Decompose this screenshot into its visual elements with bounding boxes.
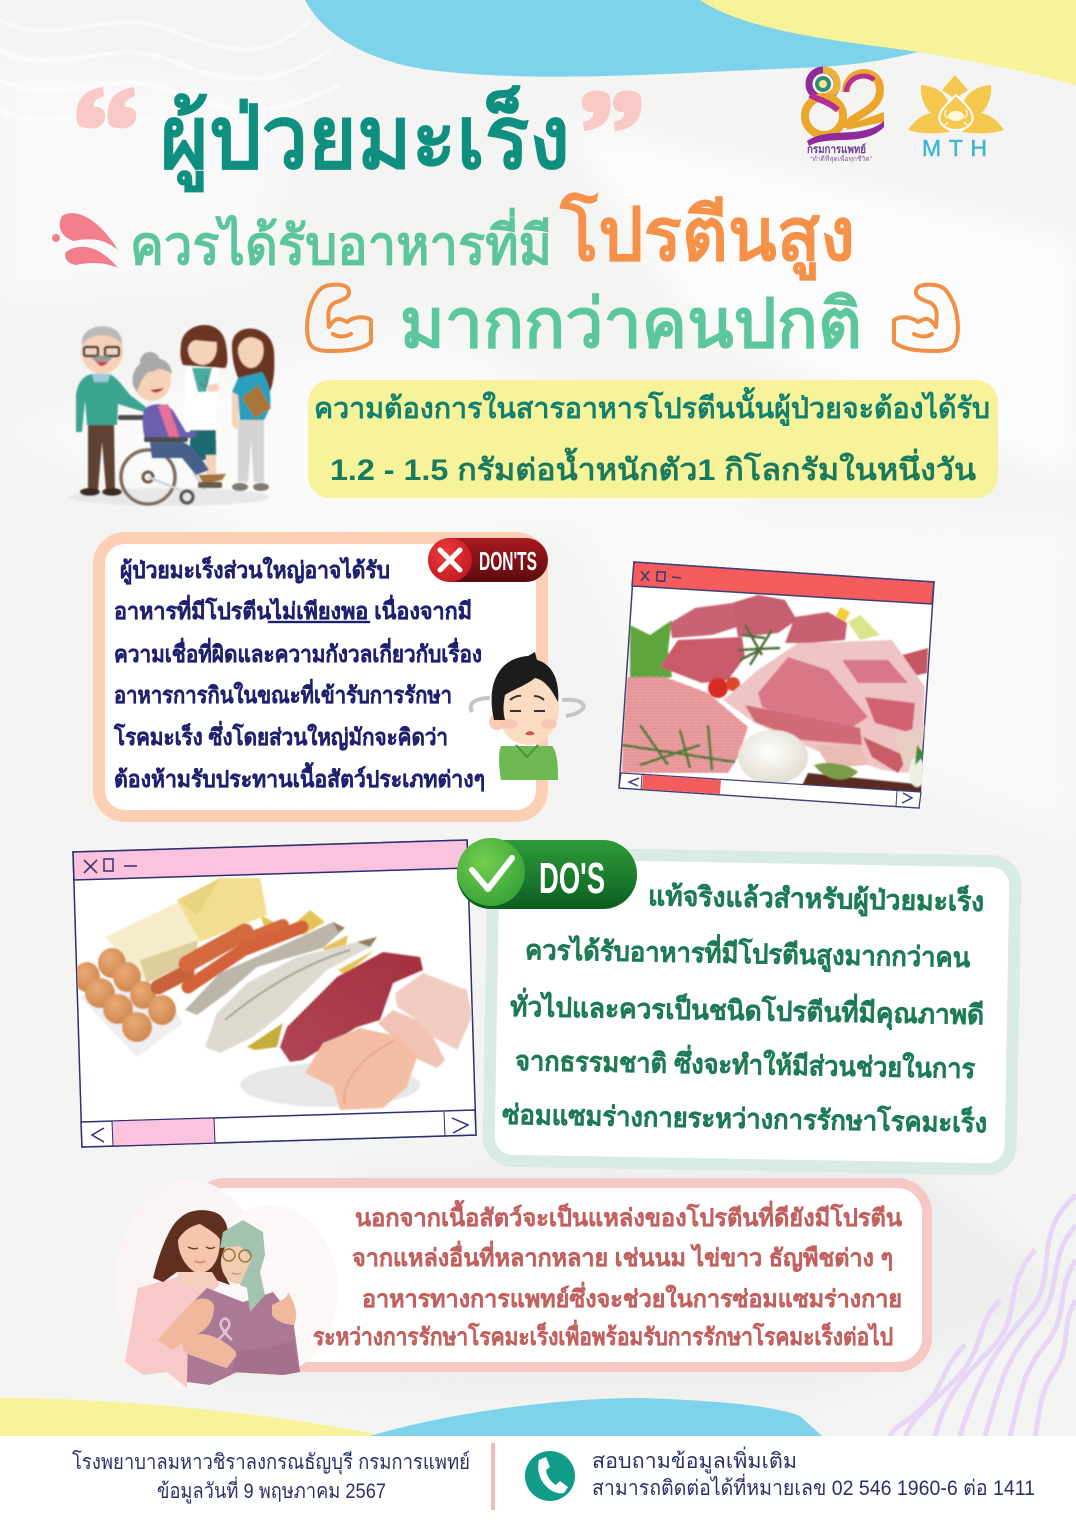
lavender wavy lines bbox=[890, 1195, 1076, 1436]
subheading text orange: high protein: โปรตีนสูง bbox=[559, 191, 855, 281]
text block: don'ts explanation: อาหารการกินในขณะที่เข้ารับการรักษา bbox=[114, 678, 452, 708]
text block: other sources: นอกจากเนื้อสัตว์จะเป็นแหล่งของโปรตีนที่ดียังมีโปรตีน bbox=[355, 1199, 903, 1232]
text block: do's explanation: แท้จริงแล้วสำหรับผู้ป่วยมะเร็ง bbox=[648, 878, 984, 919]
title: patients with cancer bbox=[76, 84, 642, 193]
bottom colour shapes bbox=[0, 1398, 822, 1436]
callout: daily protein requirement: 1.2 - 1.5 กรัมต่อน้ำหนักตัว1 กิโลกรัมในหนึ่งวัน bbox=[330, 447, 977, 487]
icon: left quote mark bbox=[76, 87, 136, 129]
logo: 82 years Department of Medical Services bbox=[805, 70, 884, 163]
footer: hospital and date bbox=[72, 1450, 470, 1504]
window controls bbox=[84, 859, 137, 873]
title bar bbox=[632, 562, 934, 604]
footer: hospital and date: โรงพยาบาลมหาวชิราลงกรณธัญบุรี กรมการแพทย์ bbox=[72, 1450, 470, 1475]
top colour shapes bbox=[305, 0, 1076, 85]
text block: other sources bbox=[313, 1199, 903, 1351]
footer bbox=[0, 1436, 1076, 1521]
text block: other sources: ระหว่างการรักษาโรคมะเร็งเพื่อพร้อมรับการรักษาโรคมะเร็งต่อไป bbox=[313, 1319, 893, 1351]
panel: don'ts bbox=[99, 538, 548, 816]
footer: contact: สอบถามข้อมูลเพิ่มเติม bbox=[592, 1446, 797, 1474]
callout: daily protein requirement: ความต้องการในสารอาหารโปรตีนนั้นผู้ป่วยจะต้องได้รับ bbox=[314, 386, 990, 426]
text block: don'ts explanation: ความเชื่อที่ผิดและความกังวลเกี่ยวกับเรื่อง bbox=[114, 637, 482, 667]
text block: don'ts explanation: ผู้ป่วยมะเร็งส่วนใหญ่อาจได้รับ bbox=[120, 555, 390, 585]
scrollbar bbox=[81, 1110, 476, 1147]
icon: left flexed arm bbox=[307, 285, 371, 351]
text block: do's explanation: ควรได้รับอาหารที่มีโปรตีนสูงมากกว่าคน bbox=[525, 930, 971, 975]
text block: other sources: จากแหล่งอื่นที่หลากหลาย เช่นนม ไข่ขาว ธัญพืชต่าง ๆ bbox=[352, 1240, 893, 1272]
text block: don'ts explanation: ต้องห้ามรับประทานเนื้อสัตว์ประเภทต่างๆ bbox=[114, 762, 485, 792]
window: raw meat photo bbox=[619, 562, 934, 808]
window controls bbox=[641, 571, 681, 581]
woman in wheelchair bbox=[118, 352, 226, 504]
logo: MTH lotus bbox=[908, 75, 1004, 161]
logo: 82 years Department of Medical Services: "ทำดีที่สุดเพื่อทุกชีวิต" bbox=[810, 154, 873, 163]
badge: do's: DO'S bbox=[539, 854, 605, 903]
heading text: ผู้ป่วยมะเร็ง bbox=[160, 84, 570, 193]
window: protein foods photo bbox=[73, 840, 476, 1147]
text block: don'ts explanation: โรคมะเร็ง ซึ่งโดยส่วนใหญ่มักจะคิดว่า bbox=[113, 720, 448, 751]
icon: right flexed arm bbox=[894, 285, 958, 351]
text block: other sources: อาหารทางการแพทย์ซึ่งจะช่วยในการซ่อมแซมร่างกาย bbox=[362, 1281, 902, 1313]
badge: don'ts bbox=[428, 538, 548, 582]
text block: don'ts explanation bbox=[113, 555, 485, 792]
subheading: should receive high protein food bbox=[52, 191, 855, 281]
title bar bbox=[73, 840, 468, 880]
photo: eggs, cheese, fish, meat bbox=[74, 878, 472, 1110]
text block: do's explanation bbox=[502, 878, 987, 1138]
elder man bbox=[76, 326, 146, 496]
subheading: more than normal people bbox=[307, 285, 958, 362]
scrollbar bbox=[619, 773, 921, 808]
badge: don'ts: DON'TS bbox=[479, 546, 537, 576]
subheading text green: ควรได้รับอาหารที่มี bbox=[130, 207, 552, 276]
text block: do's explanation: ซ่อมแซมร่างกายระหว่างการรักษาโรคมะเร็ง bbox=[502, 1097, 987, 1138]
badge: do's bbox=[457, 838, 637, 909]
subheading: more than normal people: มากกว่าคนปกติ bbox=[400, 286, 862, 362]
footer: contact: สามารถติดต่อได้ที่หมายเลข 02 546 1960-6 ต่อ 1411 bbox=[592, 1473, 1035, 1500]
callout: daily protein requirement bbox=[308, 380, 998, 498]
panel: other protein sources bbox=[115, 1180, 927, 1390]
text block: don'ts explanation: อาหารที่มีโปรตีนไม่เพียงพอ เนื่องจากมี bbox=[114, 594, 472, 624]
icon: right quote mark bbox=[582, 90, 642, 131]
text block: do's explanation: ทั่วไปและควรเป็นชนิดโปรตีนที่มีคุณภาพดี bbox=[510, 987, 984, 1032]
illustration: elderly couple and nurses bbox=[70, 325, 274, 506]
illustration: worried boy bbox=[471, 652, 584, 780]
footer: hospital and date: ข้อมูลวันที่ 9 พฤษภาคม 2567 bbox=[157, 1476, 386, 1504]
logo: 82 years Department of Medical Services: กรมการแพทย์ bbox=[807, 143, 866, 156]
footer: contact bbox=[592, 1446, 1035, 1500]
illustration: woman hugging cancer patient bbox=[125, 1210, 300, 1388]
nurse in white coat bbox=[180, 325, 227, 480]
panel: do's bbox=[457, 838, 1016, 1170]
icon: phone bbox=[525, 1451, 575, 1501]
logo: MTH lotus: MTH bbox=[922, 135, 987, 161]
photo: raw meat bbox=[622, 595, 928, 800]
text block: do's explanation: จากธรรมชาติ ซึ่งจะทำให้มีส่วนช่วยในการ bbox=[515, 1041, 976, 1084]
icon: pink splash bbox=[52, 213, 118, 268]
nurse in teal uniform bbox=[232, 329, 274, 491]
